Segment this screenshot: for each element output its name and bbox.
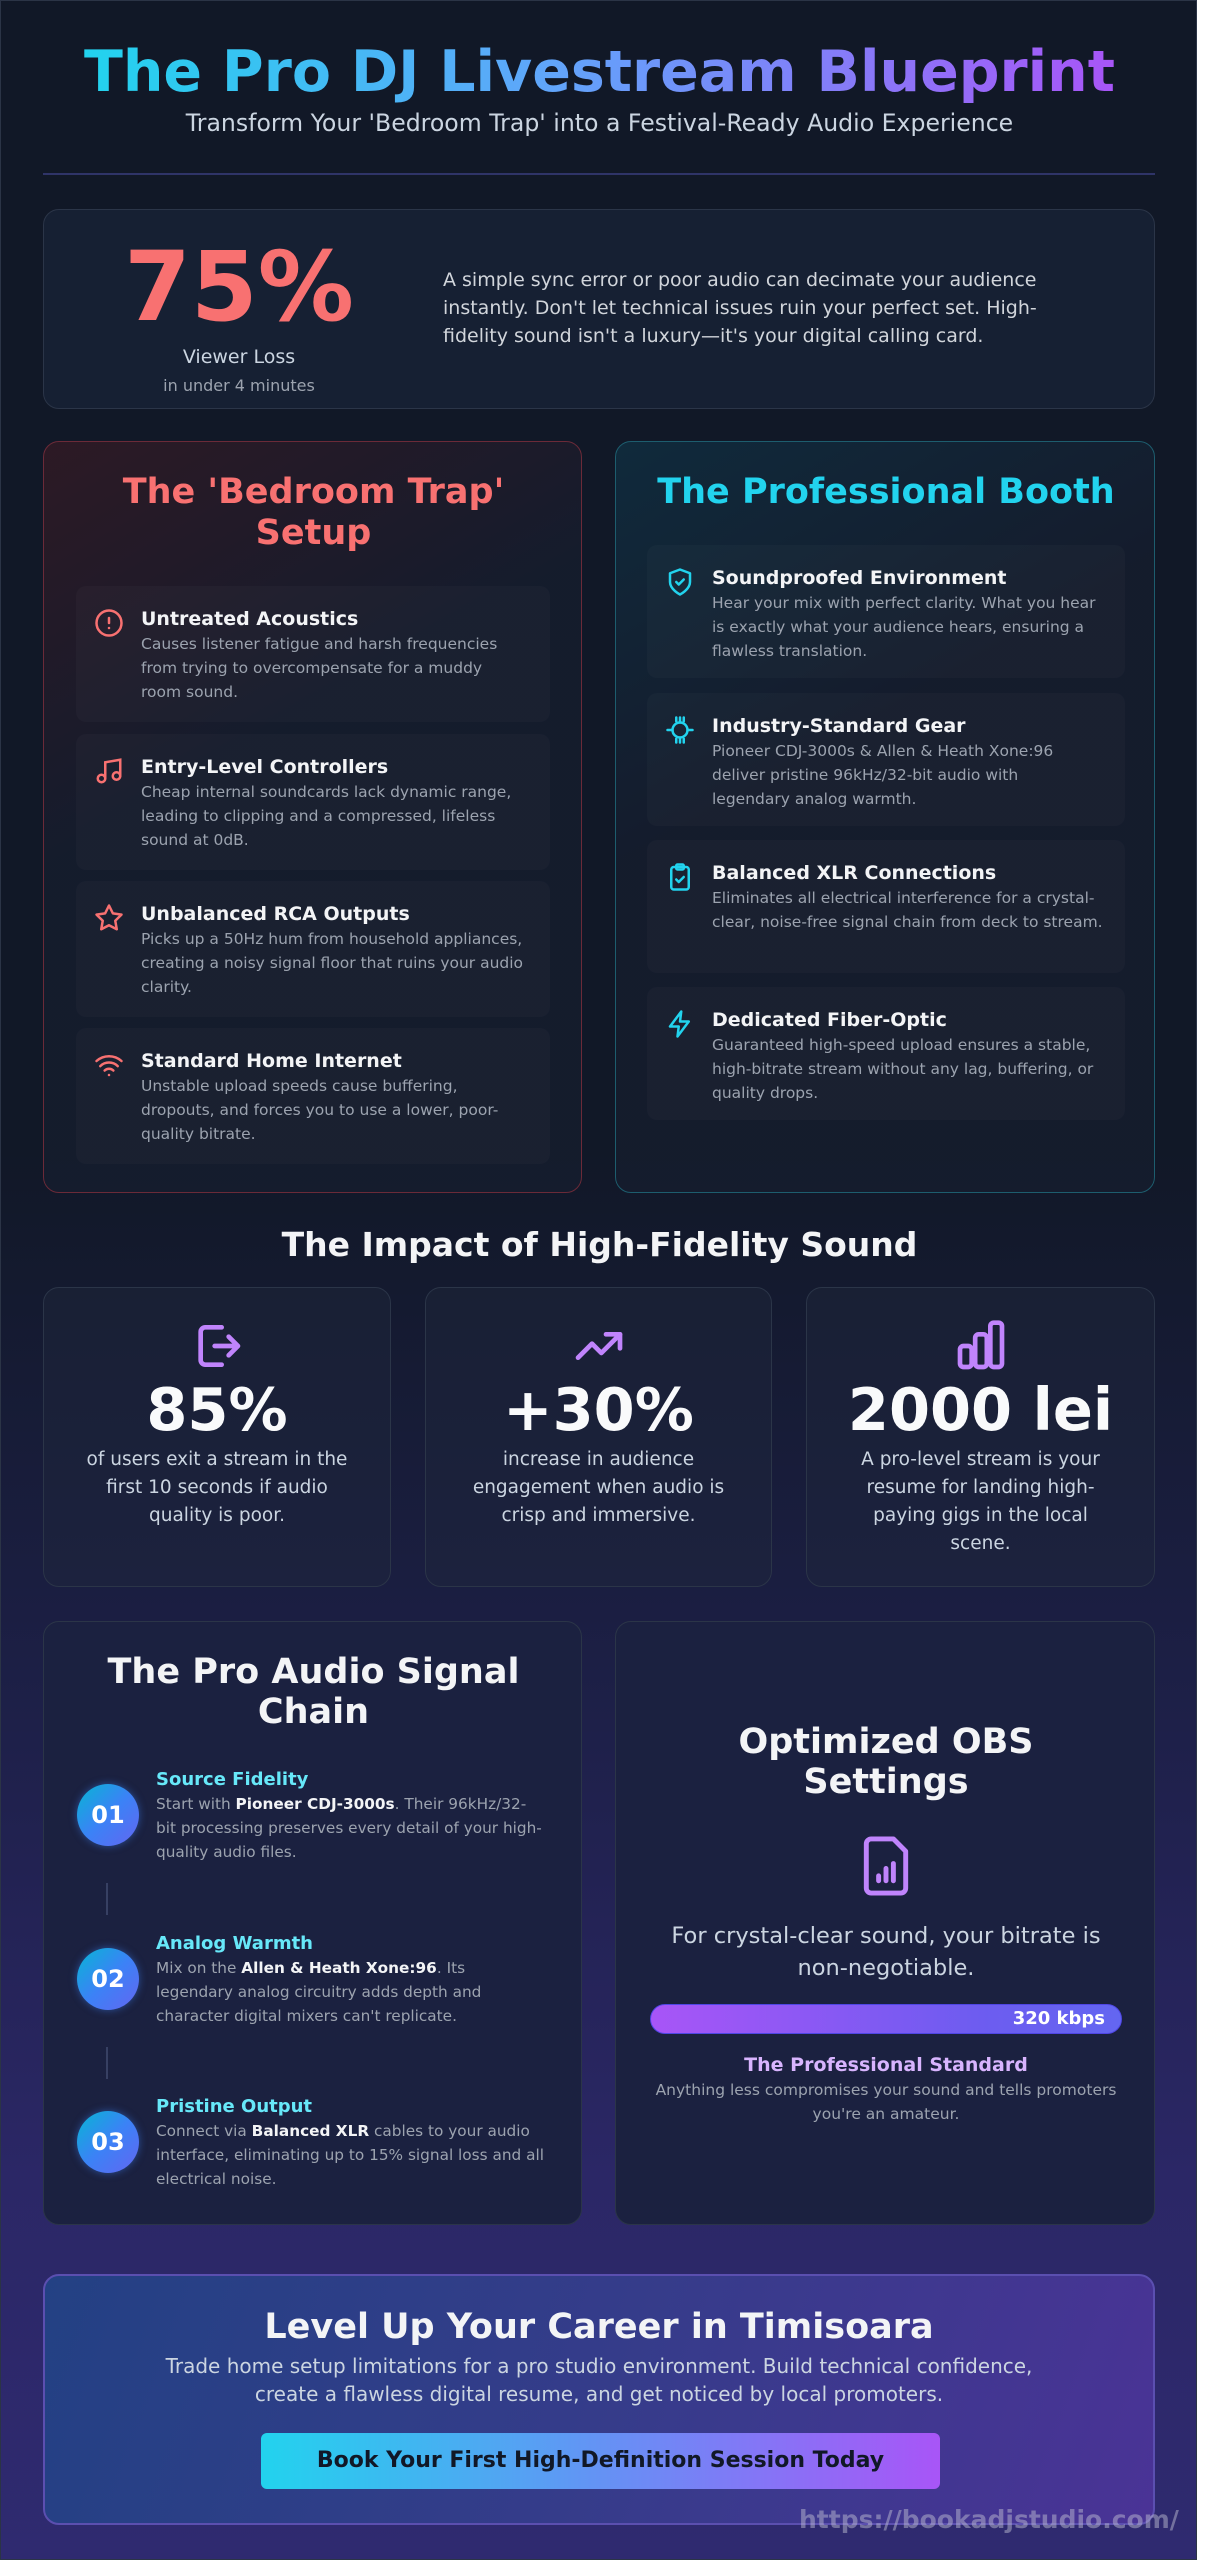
heading: bedroom trap: Setup	[256, 513, 371, 553]
heading: signal chain: Chain	[258, 1692, 369, 1732]
item: untreated acoustics: Causes listener fatigue and harsh frequencies from trying to overcompensate for a muddy room sound.	[141, 635, 497, 701]
stat card: +30%: +30%	[503, 1375, 694, 1444]
item: entry-level controllers: Entry-Level Controllers	[141, 756, 388, 778]
item: entry-level controllers	[76, 734, 550, 870]
hero paragraph: A simple sync error or poor audio can decimate your audience instantly. Don't let technical issues ruin your perfect set. High-fidelity sound isn't a luxury—it's your digital calling card.	[443, 269, 1037, 347]
stat card: 2000 lei	[806, 1287, 1155, 1587]
panel: signal chain	[43, 1621, 582, 2225]
label: professional standard	[656, 2054, 1116, 2123]
text: bitrate: For crystal-clear sound, your bitrate is non-negotiable.	[671, 1923, 1101, 1981]
item: gear: Industry-Standard Gear	[712, 715, 966, 737]
step 01	[72, 1769, 542, 1861]
stat: 75%	[124, 231, 354, 395]
item: untreated acoustics: Untreated Acoustics	[141, 608, 358, 630]
step 02: 02	[91, 1965, 125, 1993]
step 03: 03	[91, 2128, 125, 2156]
item: home internet: Standard Home Internet	[141, 1050, 402, 1072]
item: gear	[647, 693, 1125, 826]
item: xlr: Eliminates all electrical interference for a crystal-clear, noise-free signal chain from deck to stream.	[712, 889, 1103, 931]
url watermark: https://bookadjstudio.com/	[799, 2505, 1179, 2534]
heading: OBS	[738, 1722, 1034, 1802]
step 01: Start with Pioneer CDJ-3000s. Their 96kHz/32-bit processing preserves every detail of your high-quality audio files.	[156, 1795, 542, 1861]
icon: file chart	[864, 1836, 908, 1896]
subtitle: Transform Your 'Bedroom Trap' into a Festival-Ready Audio Experience	[186, 109, 1013, 137]
CTA heading: Level Up Your Career in Timisoara	[264, 2307, 934, 2347]
heading: professional booth: The Professional Booth	[657, 472, 1115, 512]
label: professional standard: Anything less compromises your sound and tells promoters you're an amateur.	[656, 2081, 1116, 2123]
stat: 75%: 75%	[124, 231, 354, 343]
item: home internet: Unstable upload speeds cause buffering, dropouts, and forces you to use a lower, poor-quality bitrate.	[141, 1077, 498, 1143]
heading: signal chain	[108, 1652, 519, 1732]
stat card: +30%	[425, 1287, 772, 1587]
CTA text: create a flawless digital resume, and get noticed by local promoters.	[255, 2382, 943, 2406]
panel: bedroom trap	[43, 441, 582, 1193]
CTA text: Trade home setup limitations for a pro studio environment. Build technical confidence,	[166, 2354, 1032, 2378]
item: home internet	[76, 1028, 550, 1164]
item: fiber: Guaranteed high-speed upload ensures a stable, high-bitrate stream without any lag, buffering, or quality drops.	[712, 1036, 1093, 1102]
step 02	[72, 1933, 481, 2025]
stat card: 2000 lei: 2000 lei	[848, 1375, 1113, 1444]
heading: signal chain: The Pro Audio Signal	[108, 1652, 519, 1692]
stat: 75%: Viewer Loss	[183, 346, 295, 368]
heading: bedroom trap: The 'Bedroom Trap'	[123, 472, 504, 512]
stat card: 85%: of users exit a stream in the first 10 seconds if audio quality is poor.	[87, 1449, 347, 1526]
title: The Pro DJ Livestream Blueprint	[84, 39, 1115, 105]
hero stat card	[43, 209, 1155, 409]
item: fiber: Dedicated Fiber-Optic	[712, 1009, 947, 1031]
stat card: 85%	[43, 1287, 391, 1587]
item: xlr: Balanced XLR Connections	[712, 862, 996, 884]
bar: 320 kbps	[650, 2004, 1122, 2034]
step 03	[72, 2096, 544, 2188]
heading: OBS: Settings	[803, 1762, 969, 1802]
heading: impact: The Impact of High-Fidelity Sound	[282, 1225, 917, 1264]
item: unbalanced rca: Picks up a 50Hz hum from household appliances, creating a noisy signal floor that ruins your audio clarity.	[141, 930, 523, 996]
step 02: Analog Warmth	[156, 1933, 313, 1954]
item: xlr	[647, 840, 1125, 973]
stat: 75%: in under 4 minutes	[163, 376, 315, 395]
step 01: Source Fidelity	[156, 1769, 308, 1790]
item: soundproofed: Hear your mix with perfect clarity. What you hear is exactly what your audience hears, ensuring a flawless translation.	[712, 594, 1096, 660]
CTA text	[166, 2354, 1032, 2406]
panel: professional booth	[615, 441, 1155, 1193]
step 02: Mix on the Allen & Heath Xone:96. Its legendary analog circuitry adds depth and character digital mixers can't replicate.	[156, 1959, 481, 2025]
heading: bedroom trap	[122, 472, 504, 553]
bar: 320 kbps: 320 kbps	[1013, 2008, 1105, 2029]
heading: OBS: Optimized OBS	[738, 1722, 1034, 1762]
item: fiber	[647, 987, 1125, 1120]
CTA panel	[43, 2274, 1155, 2525]
step 03: Connect via Balanced XLR cables to your audio interface, eliminating up to 15% signal loss and all electrical noise.	[156, 2122, 544, 2188]
CTA button: Book Your First High-Definition Session Today	[317, 2448, 884, 2473]
item: unbalanced rca	[76, 881, 550, 1017]
step 01: 01	[91, 1801, 125, 1829]
stat card: +30%: increase in audience engagement when audio is crisp and immersive.	[473, 1449, 724, 1526]
label: professional standard: The Professional Standard	[744, 2054, 1028, 2076]
CTA button	[261, 2433, 940, 2489]
step 03: Pristine Output	[156, 2096, 312, 2117]
item: untreated acoustics	[76, 586, 550, 722]
item: gear: Pioneer CDJ-3000s & Allen & Heath Xone:96 deliver pristine 96kHz/32-bit audio with legendary analog warmth.	[712, 742, 1053, 808]
stat card: 85%: 85%	[146, 1375, 288, 1444]
panel: OBS settings	[615, 1621, 1155, 2225]
stat card: 2000 lei: A pro-level stream is your resume for landing high-paying gigs in the local scene.	[861, 1449, 1100, 1554]
item: soundproofed: Soundproofed Environment	[712, 567, 1006, 589]
item: soundproofed	[647, 545, 1125, 678]
item: unbalanced rca: Unbalanced RCA Outputs	[141, 903, 410, 925]
item: entry-level controllers: Cheap internal soundcards lack dynamic range, leading to clipping and a compressed, lifeless sound at 0dB.	[141, 783, 511, 849]
